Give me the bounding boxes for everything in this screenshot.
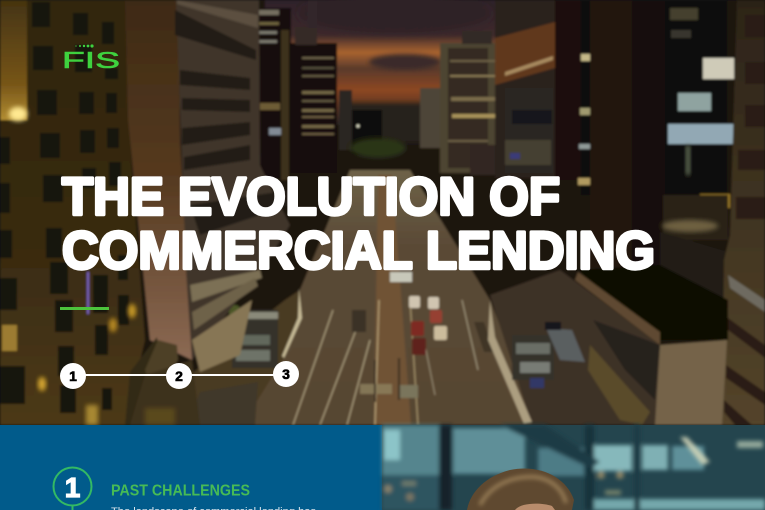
photo: businessperson in blurred office bbox=[382, 425, 765, 510]
traffic cars bbox=[360, 272, 447, 402]
step 1: 1 bbox=[69, 368, 77, 384]
dark office tower bbox=[590, 0, 734, 300]
panel: past challenges bbox=[0, 425, 382, 510]
glass tower reflecting sunset bbox=[495, 0, 594, 195]
right sidewalk and bus shelter bbox=[488, 270, 660, 425]
distant towers bbox=[257, 0, 440, 180]
dark rooftop and tan wall bbox=[575, 265, 728, 425]
step 2 bbox=[166, 363, 192, 389]
step 1 badge bbox=[54, 468, 92, 510]
step 3 bbox=[273, 361, 299, 387]
FIS logo: FIS bbox=[62, 47, 120, 73]
street trees at vanishing point bbox=[350, 124, 406, 158]
step 2: 2 bbox=[175, 368, 183, 384]
sky at sunset bbox=[265, 0, 505, 143]
title: THE EVOLUTION OF bbox=[62, 168, 560, 226]
title bbox=[62, 168, 655, 280]
step 3: 3 bbox=[282, 366, 290, 382]
tan mid-rise building bbox=[440, 31, 508, 175]
left sidewalk and bus shelter bbox=[180, 288, 302, 425]
timeline steps 1-2-3 bbox=[60, 361, 299, 389]
step 1 badge: 1 bbox=[65, 472, 80, 503]
right-edge building bbox=[722, 0, 765, 425]
step 1 bbox=[60, 363, 86, 389]
green accent bar bbox=[60, 307, 109, 310]
mid-block building column and balconies bbox=[125, 0, 290, 425]
title: COMMERCIAL LENDING bbox=[62, 222, 655, 280]
avenue road surface bbox=[240, 170, 540, 425]
heading: PAST CHALLENGES bbox=[111, 482, 250, 500]
portrait hair and forehead bbox=[467, 468, 574, 510]
FIS logo bbox=[62, 44, 120, 73]
left corner building bbox=[0, 0, 145, 425]
